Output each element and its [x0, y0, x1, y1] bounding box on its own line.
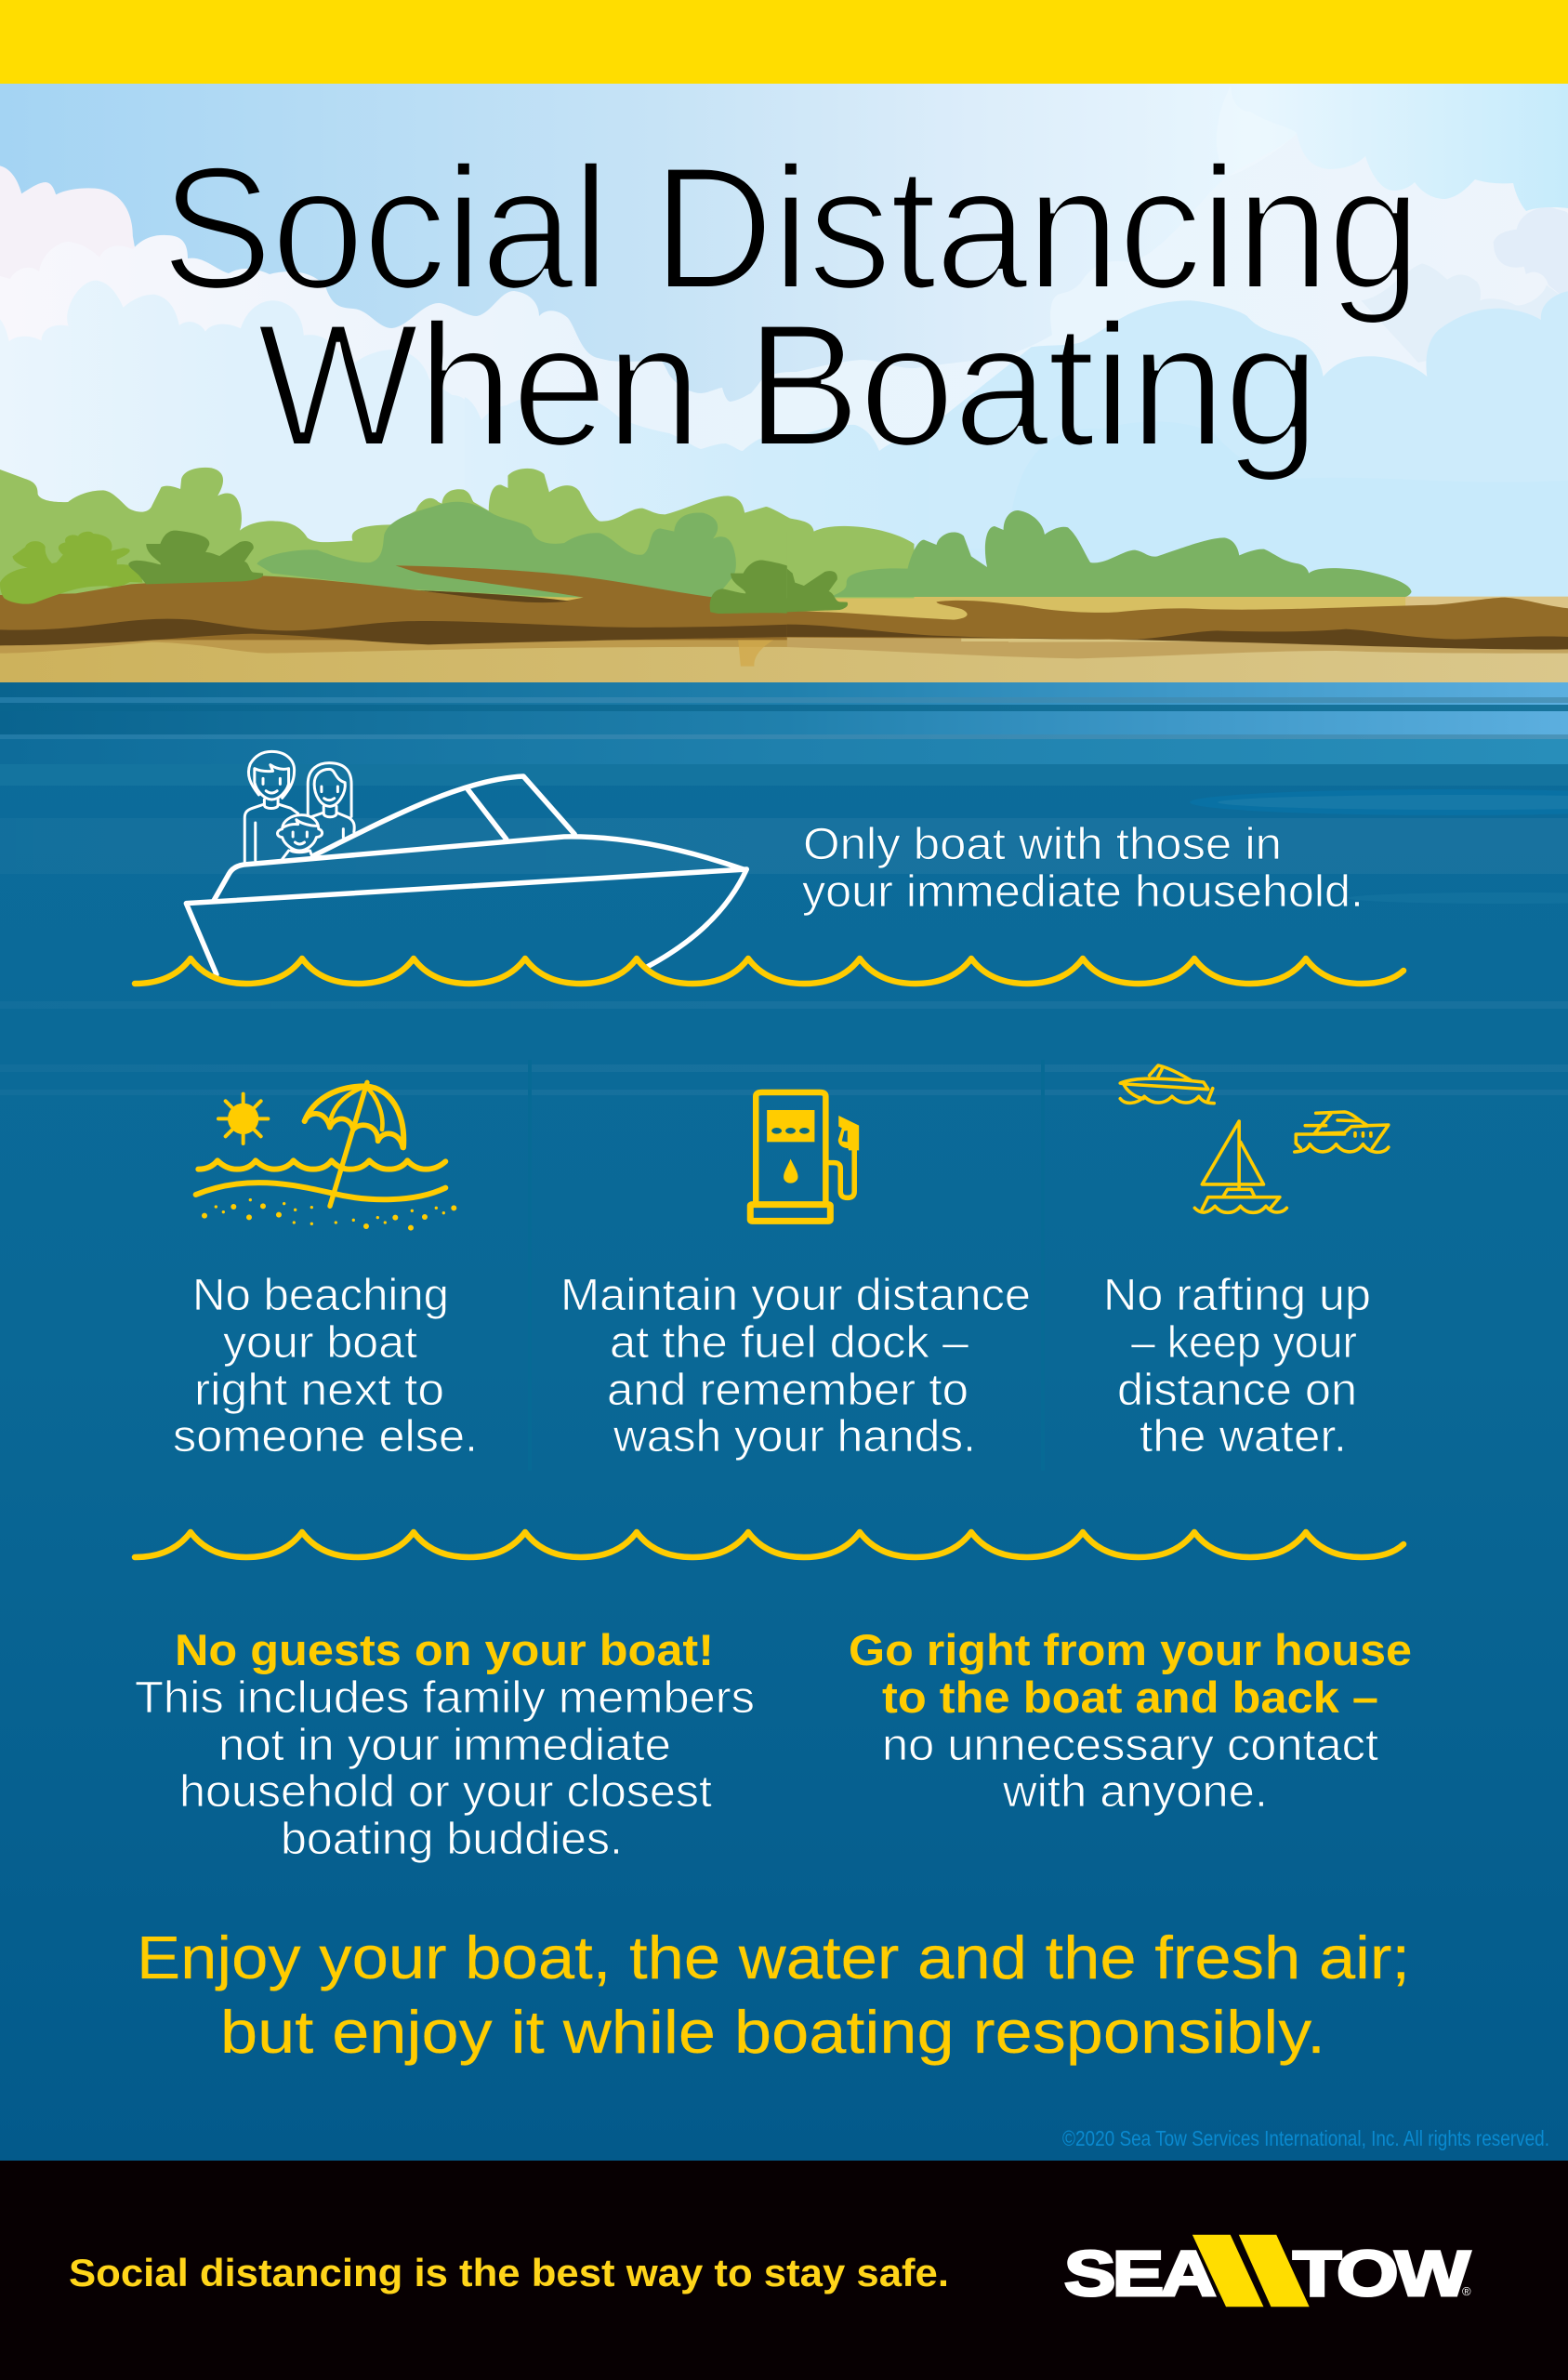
cloud: right grey-blue puff: [1494, 207, 1568, 300]
text: no beaching: right next to: [194, 1366, 444, 1415]
wave divider bottom: [135, 1532, 1403, 1557]
text: no rafting up: the water.: [1140, 1412, 1347, 1461]
cloud: right grey-blue lower puff: [1361, 263, 1568, 363]
text: no guests on your boat: boating buddies.: [281, 1815, 623, 1864]
light sand strip: [961, 638, 1237, 642]
closing message: but enjoy it while boating responsibly.: [220, 1998, 1325, 2066]
yacht: [1295, 1112, 1389, 1152]
logo: Sea Tow: ®: [1462, 2284, 1471, 2298]
text: fuel dock distance: Maintain your distance: [560, 1271, 1031, 1320]
cloud: white mid cloud: [0, 133, 1568, 614]
text: fuel dock distance: [560, 1271, 1031, 1461]
text: no rafting up: – keep your: [1131, 1318, 1357, 1368]
text: no guests on your boat: No guests on your boat!: [175, 1625, 714, 1674]
shoreline: right half: [787, 510, 1568, 658]
bush: centre green right part: [787, 569, 848, 612]
text: go right from house to boat: [849, 1625, 1412, 1817]
text: no rafting up: No rafting up: [1103, 1271, 1371, 1320]
text: no guests on your boat: This includes family members: [135, 1673, 755, 1723]
cloud: top right pale puff: [1217, 86, 1297, 177]
shoreline: left half: [0, 468, 792, 667]
sailboat: [1194, 1121, 1286, 1212]
title: Social Distancing: [161, 130, 1419, 325]
cloud: lower right haze: [1011, 421, 1568, 611]
text: no beaching: your boat: [223, 1318, 417, 1368]
boat outline: [186, 776, 746, 974]
logo: Sea Tow: TOW: [1293, 2238, 1471, 2309]
text: no beaching: someone else.: [173, 1412, 478, 1461]
text: no rafting up: distance on: [1117, 1366, 1357, 1415]
cloud: centre lower blue: [465, 393, 1115, 614]
text: only boat with household: [802, 820, 1364, 917]
small motorboat: [1120, 1065, 1214, 1104]
title: [161, 130, 1419, 483]
text: go right from house to boat: with anyone.: [1002, 1767, 1268, 1817]
footer band: [0, 2161, 1568, 2380]
text: only boat with household: Only boat with those in: [803, 820, 1282, 869]
bush: centre green left part: [710, 561, 792, 614]
beach sliver: [514, 597, 584, 602]
bush: bright green left: [0, 532, 142, 604]
text: fuel dock distance: wash your hands.: [613, 1412, 976, 1461]
trees: light green back: [0, 468, 792, 607]
column dividers: [528, 1060, 1045, 1471]
brown bank: [0, 565, 792, 640]
text: no beaching: No beaching: [192, 1271, 449, 1320]
icon: three spaced boats: [1120, 1065, 1389, 1212]
cloud: pale blue left cloud: [0, 281, 539, 611]
trees: medium green right: [830, 510, 1412, 597]
text: no beaching: [173, 1271, 478, 1461]
closing message: [137, 1924, 1410, 2066]
text: only boat with household: your immediate household.: [802, 867, 1364, 917]
text: fuel dock distance: at the fuel dock –: [610, 1318, 968, 1368]
icon: sun, beach umbrella and sand: [196, 1082, 456, 1231]
trees: medium green: [257, 502, 736, 598]
yellow top bar: [0, 0, 1568, 84]
text: no rafting up: [1103, 1271, 1371, 1461]
text: go right from house to boat: no unnecessary contact: [882, 1721, 1378, 1770]
trees: light green back: [787, 518, 915, 598]
sky with clouds: [0, 84, 1568, 614]
sand reflection mark: [738, 640, 773, 667]
brown bank: [787, 598, 1568, 641]
bush: dark green left: [128, 531, 263, 584]
logo: Sea Tow: [1064, 2233, 1471, 2309]
cloud: right blue cloud: [929, 291, 1568, 549]
sand base and beach band: [788, 597, 1568, 646]
text: fuel dock distance: and remember to: [607, 1366, 968, 1415]
text: no guests on your boat: not in your immediate: [218, 1721, 671, 1770]
footer tagline: Social distancing is the best way to stay safe.: [69, 2251, 949, 2294]
family figures: [244, 751, 354, 862]
text: go right from house to boat: Go right from your house: [849, 1625, 1412, 1674]
text: no guests on your boat: [135, 1625, 755, 1864]
cloud: pink back cloud: [0, 165, 141, 288]
wave divider top: [135, 959, 1403, 984]
wet sand: [787, 637, 1568, 658]
text: go right from house to boat: to the boat and back –: [882, 1673, 1378, 1722]
text: no guests on your boat: household or your closest: [179, 1767, 712, 1817]
closing message: Enjoy your boat, the water and the fresh air;: [137, 1924, 1410, 1991]
water background: [0, 682, 1568, 2161]
icon: fuel pump: [750, 1092, 859, 1221]
wet sand: [0, 637, 792, 654]
dark brown bank shadow: [787, 625, 1568, 650]
shoreline landscape: [0, 468, 1568, 682]
title: When Boating: [257, 287, 1318, 483]
icon: family on motorboat: [186, 751, 746, 974]
dark brown bank shadow: [0, 619, 792, 645]
logo: Sea Tow: SEA: [1064, 2238, 1216, 2309]
dark sliver: [418, 590, 570, 602]
